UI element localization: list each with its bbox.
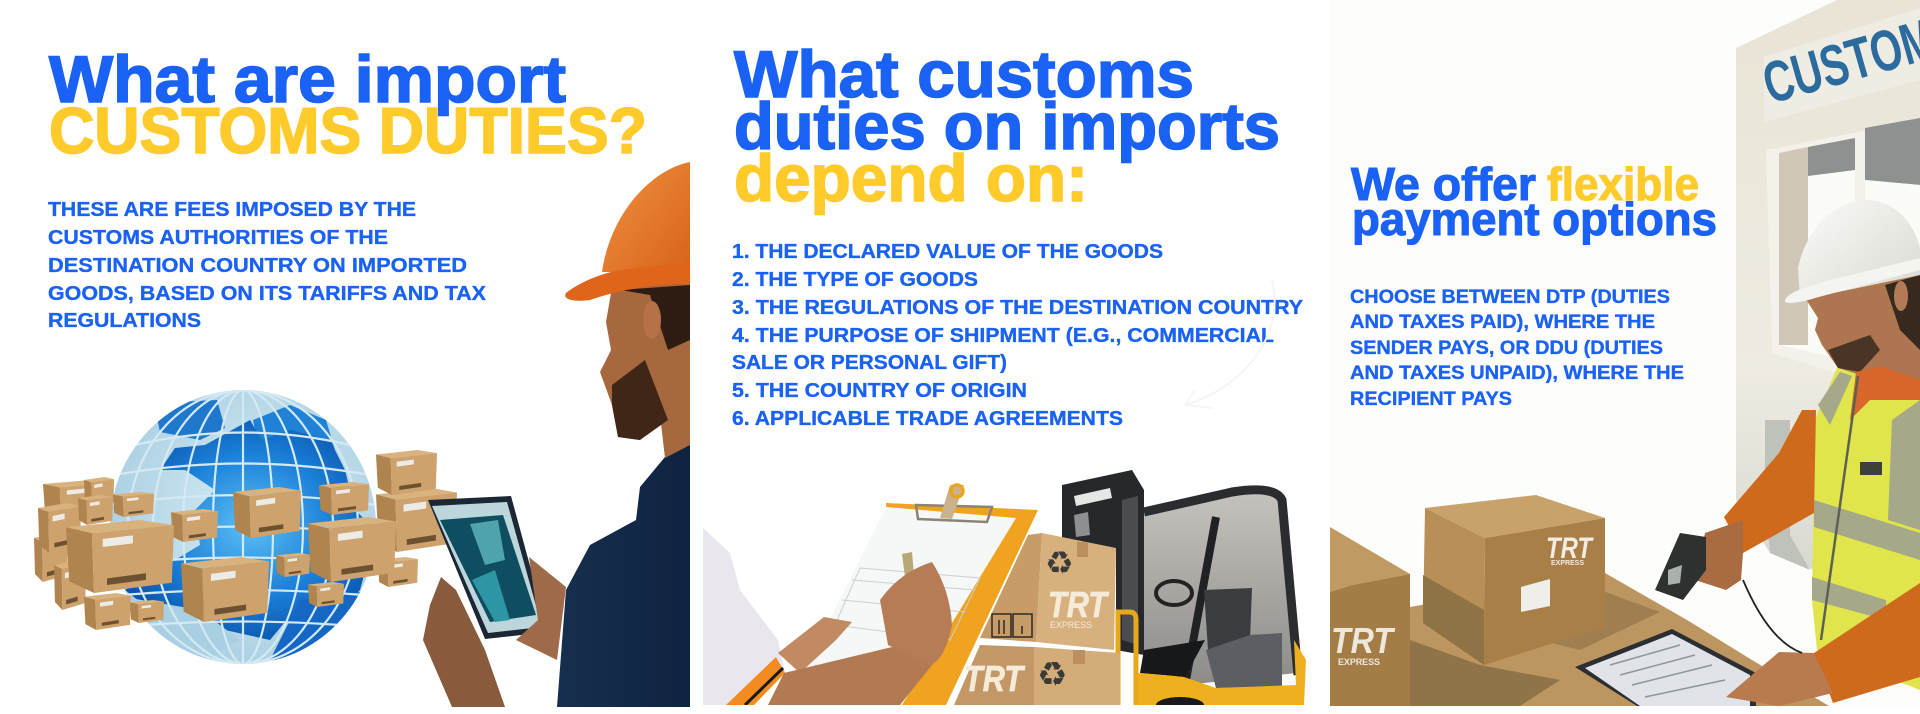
icon: globe with parcels — [34, 390, 457, 664]
booth sign — [1764, 8, 1920, 122]
text block: definition: CUSTOMS AUTHORITIES OF THE — [48, 226, 388, 249]
logo: TRT on main carton: TRT — [1546, 532, 1594, 565]
text block: DTP and DDU explanation: RECIPIENT PAYS — [1350, 389, 1512, 410]
text block: definition: DESTINATION COUNTRY ON IMPORTED — [48, 254, 467, 277]
hard hat — [565, 162, 690, 301]
title: flexible payment options: payment options — [1352, 193, 1717, 245]
booth window — [1766, 118, 1920, 368]
panel: what customs duties depend on — [703, 37, 1306, 713]
title: what customs duties depend on: What customs — [734, 37, 1194, 111]
panel: flexible payment options — [1330, 0, 1920, 706]
text block: list of factors: 4. THE PURPOSE OF SHIPMENT (E.G., COMMERCIAL — [732, 325, 1274, 347]
title: what customs duties depend on: depend on: — [734, 141, 1088, 215]
title: what are import customs duties: CUSTOMS DUTIES? — [49, 94, 647, 167]
title: what are import customs duties: What are import — [49, 42, 566, 116]
text block: definition: GOODS, BASED ON ITS TARIFFS AND TAX — [48, 282, 486, 305]
logo: TRT on upper carton: TRT — [1048, 584, 1110, 625]
icon: recycle lower: ♻ — [1037, 655, 1067, 695]
worker shirt — [557, 440, 690, 707]
worker neck and face — [600, 270, 690, 458]
left hand — [423, 577, 505, 707]
clipboard with form — [1575, 629, 1756, 706]
text block: list of factors: 6. APPLICABLE TRADE AGREEMENTS — [732, 408, 1123, 430]
title: what customs duties depend on: duties on imports — [734, 89, 1280, 163]
worker head — [1800, 260, 1920, 380]
text block: definition: THESE ARE FEES IMPOSED BY THE — [48, 198, 416, 221]
illustration: worker with tablet — [423, 162, 690, 707]
text block: list of factors: 1. THE DECLARED VALUE OF THE GOODS — [732, 241, 1163, 263]
title: what are import customs duties — [48, 53, 644, 154]
illustration: forklift — [1062, 470, 1306, 713]
text block: definition — [48, 198, 486, 332]
hand holding scanner — [1695, 520, 1743, 590]
text block: definition: REGULATIONS — [48, 309, 201, 332]
text block: DTP and DDU explanation: SENDER PAYS, OR DDU (DUTIES — [1350, 338, 1663, 359]
illustration: worker with scanner — [1655, 200, 1920, 706]
title: flexible payment options: flexible — [1547, 158, 1699, 210]
text block: DTP and DDU explanation — [1350, 287, 1684, 410]
title: what customs duties depend on — [734, 37, 1280, 215]
right hand — [516, 557, 566, 660]
illustration: stacked cartons — [954, 533, 1120, 705]
panel: what are import customs duties — [34, 42, 690, 707]
text block: list of factors: 2. THE TYPE OF GOODS — [732, 269, 978, 291]
logo: TRT on lower carton: TRT — [964, 658, 1026, 699]
icon: handling marks — [992, 614, 1032, 637]
illustration: cartons on table — [1330, 495, 1829, 706]
logo: express on left carton: EXPRESS — [1338, 657, 1380, 667]
illustration: clipboard — [798, 485, 1038, 705]
title: flexible payment options — [1351, 158, 1717, 245]
hard hat — [1785, 200, 1920, 303]
text block: list of factors — [732, 241, 1304, 430]
safety vest — [1812, 368, 1920, 690]
title: flexible payment options: We offer — [1351, 158, 1536, 210]
logo: TRT on left carton: TRT — [1331, 620, 1396, 661]
main carton — [1423, 495, 1605, 665]
text block: DTP and DDU explanation: CHOOSE BETWEEN DTP (DUTIES — [1350, 287, 1670, 308]
icon: recycle upper: ♻ — [1045, 544, 1074, 582]
left carton — [1330, 527, 1410, 706]
right sleeve — [1814, 583, 1920, 703]
text block: DTP and DDU explanation: AND TAXES PAID), WHERE THE — [1350, 312, 1655, 333]
text block: DTP and DDU explanation: AND TAXES UNPAID), WHERE THE — [1350, 363, 1684, 384]
illustration: customs booth — [1736, 0, 1920, 570]
text block: list of factors: 3. THE REGULATIONS OF THE DESTINATION COUNTRY — [732, 297, 1304, 319]
illustration: inspector arm — [703, 528, 952, 705]
hand on document — [1726, 652, 1833, 706]
logo: express on upper carton: EXPRESS — [1050, 620, 1092, 630]
text block: list of factors: SALE OR PERSONAL GIFT) — [732, 352, 1007, 374]
logo: express on main carton: EXPRESS — [1551, 560, 1584, 567]
left sleeve — [1724, 410, 1816, 553]
text block: list of factors: 5. THE COUNTRY OF ORIGIN — [732, 380, 1027, 402]
tablet — [428, 496, 548, 639]
barcode scanner — [1655, 533, 1802, 653]
